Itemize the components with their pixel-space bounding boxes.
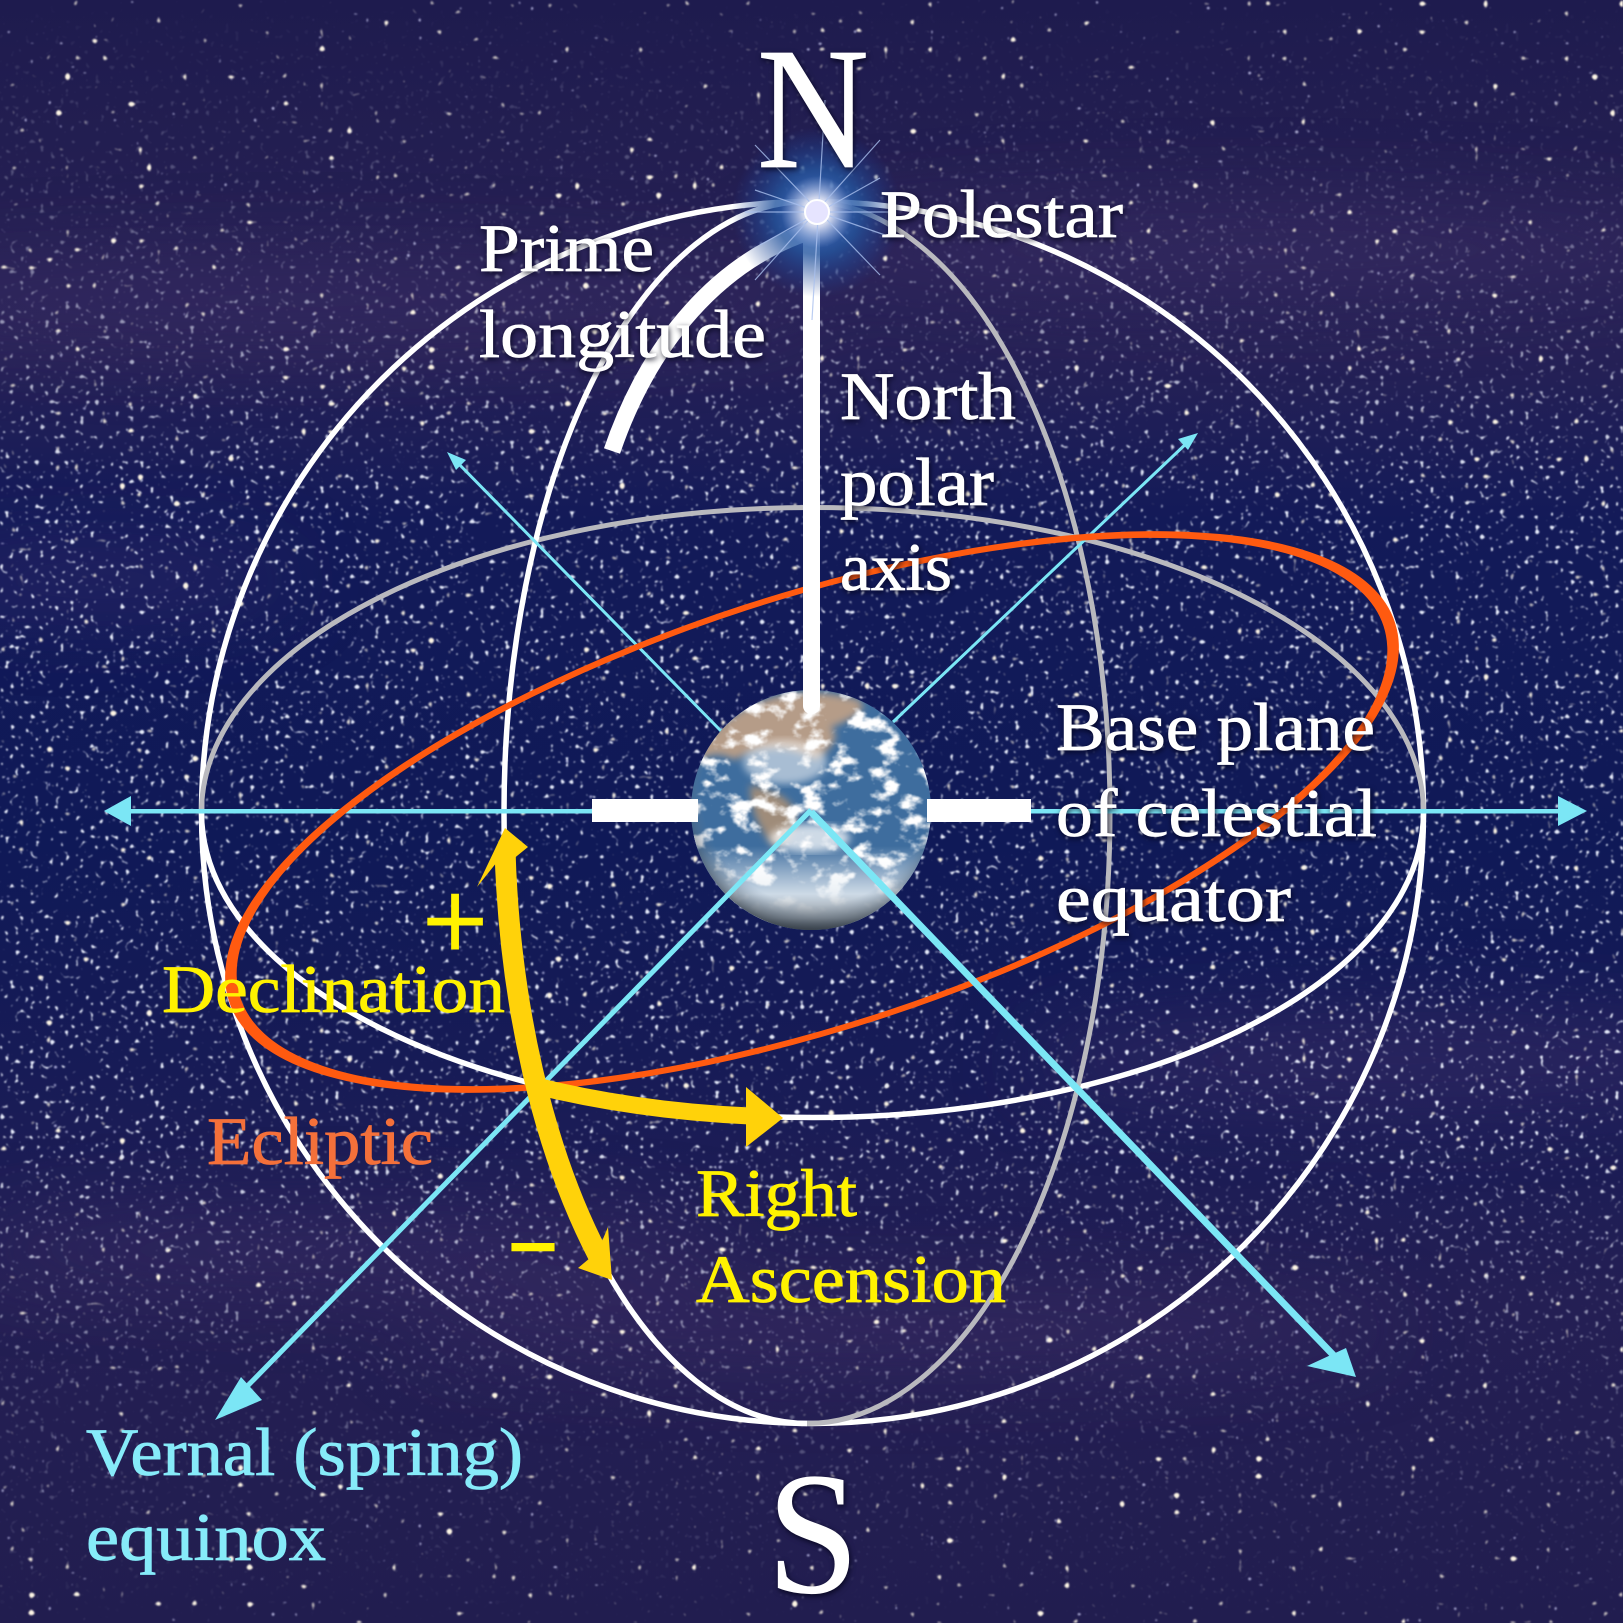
- label: minus sign: −: [509, 1201, 557, 1294]
- label: Prime longitude: longitude: [479, 296, 766, 372]
- label: Prime longitude: Prime: [479, 210, 654, 286]
- celestial equator: far half: [202, 508, 1424, 812]
- label: Base plane of celestial equator: [1056, 689, 1377, 936]
- label: Ecliptic: Ecliptic: [207, 1103, 433, 1179]
- label: Base plane of celestial equator: of celestial: [1056, 775, 1377, 851]
- label: N: N: [757, 12, 869, 205]
- label: North polar axis: polar: [840, 444, 994, 520]
- cyan axis: upper left: [447, 452, 722, 732]
- meridian: right half: [807, 202, 1110, 1424]
- prime meridian: left half: [504, 202, 807, 1424]
- label: North polar axis: axis: [840, 529, 952, 605]
- cyan axis: lower right: [811, 812, 1356, 1377]
- label: North polar axis: [840, 358, 1016, 605]
- ecliptic orbit: [162, 415, 1462, 1209]
- label: Base plane of celestial equator: Base plane: [1056, 689, 1375, 765]
- label: North polar axis: North: [840, 358, 1016, 434]
- label: Vernal (spring) equinox: Vernal (spring): [86, 1414, 523, 1490]
- celestial sphere outline: [202, 202, 1424, 1424]
- prime longitude thick arc: [612, 232, 808, 451]
- label: Base plane of celestial equator: equator: [1056, 860, 1291, 936]
- north polar axis: [803, 212, 820, 714]
- label: Right Ascension: [696, 1155, 1006, 1317]
- base plane bars: [592, 799, 1031, 822]
- label: Declination: Declination: [162, 951, 505, 1027]
- celestial equator: near half: [202, 812, 1424, 1118]
- label: plus sign: +: [423, 858, 487, 985]
- cyan axis: horizontal: [104, 796, 1587, 826]
- label: Polestar: Polestar: [880, 176, 1123, 252]
- label: Vernal (spring) equinox: [86, 1414, 523, 1575]
- label: Right Ascension: Right: [696, 1155, 857, 1231]
- icon: polestar: [732, 100, 902, 320]
- cyan axis: upper right: [893, 433, 1198, 722]
- label: Prime longitude: [479, 210, 766, 372]
- declination arrow: [477, 828, 612, 1280]
- label: Right Ascension: Ascension: [696, 1241, 1006, 1317]
- right ascension arrow: [532, 1085, 783, 1147]
- icon: Earth: [690, 690, 932, 930]
- cyan axis: vernal equinox direction: [215, 810, 811, 1420]
- label: Vernal (spring) equinox: equinox: [86, 1499, 326, 1575]
